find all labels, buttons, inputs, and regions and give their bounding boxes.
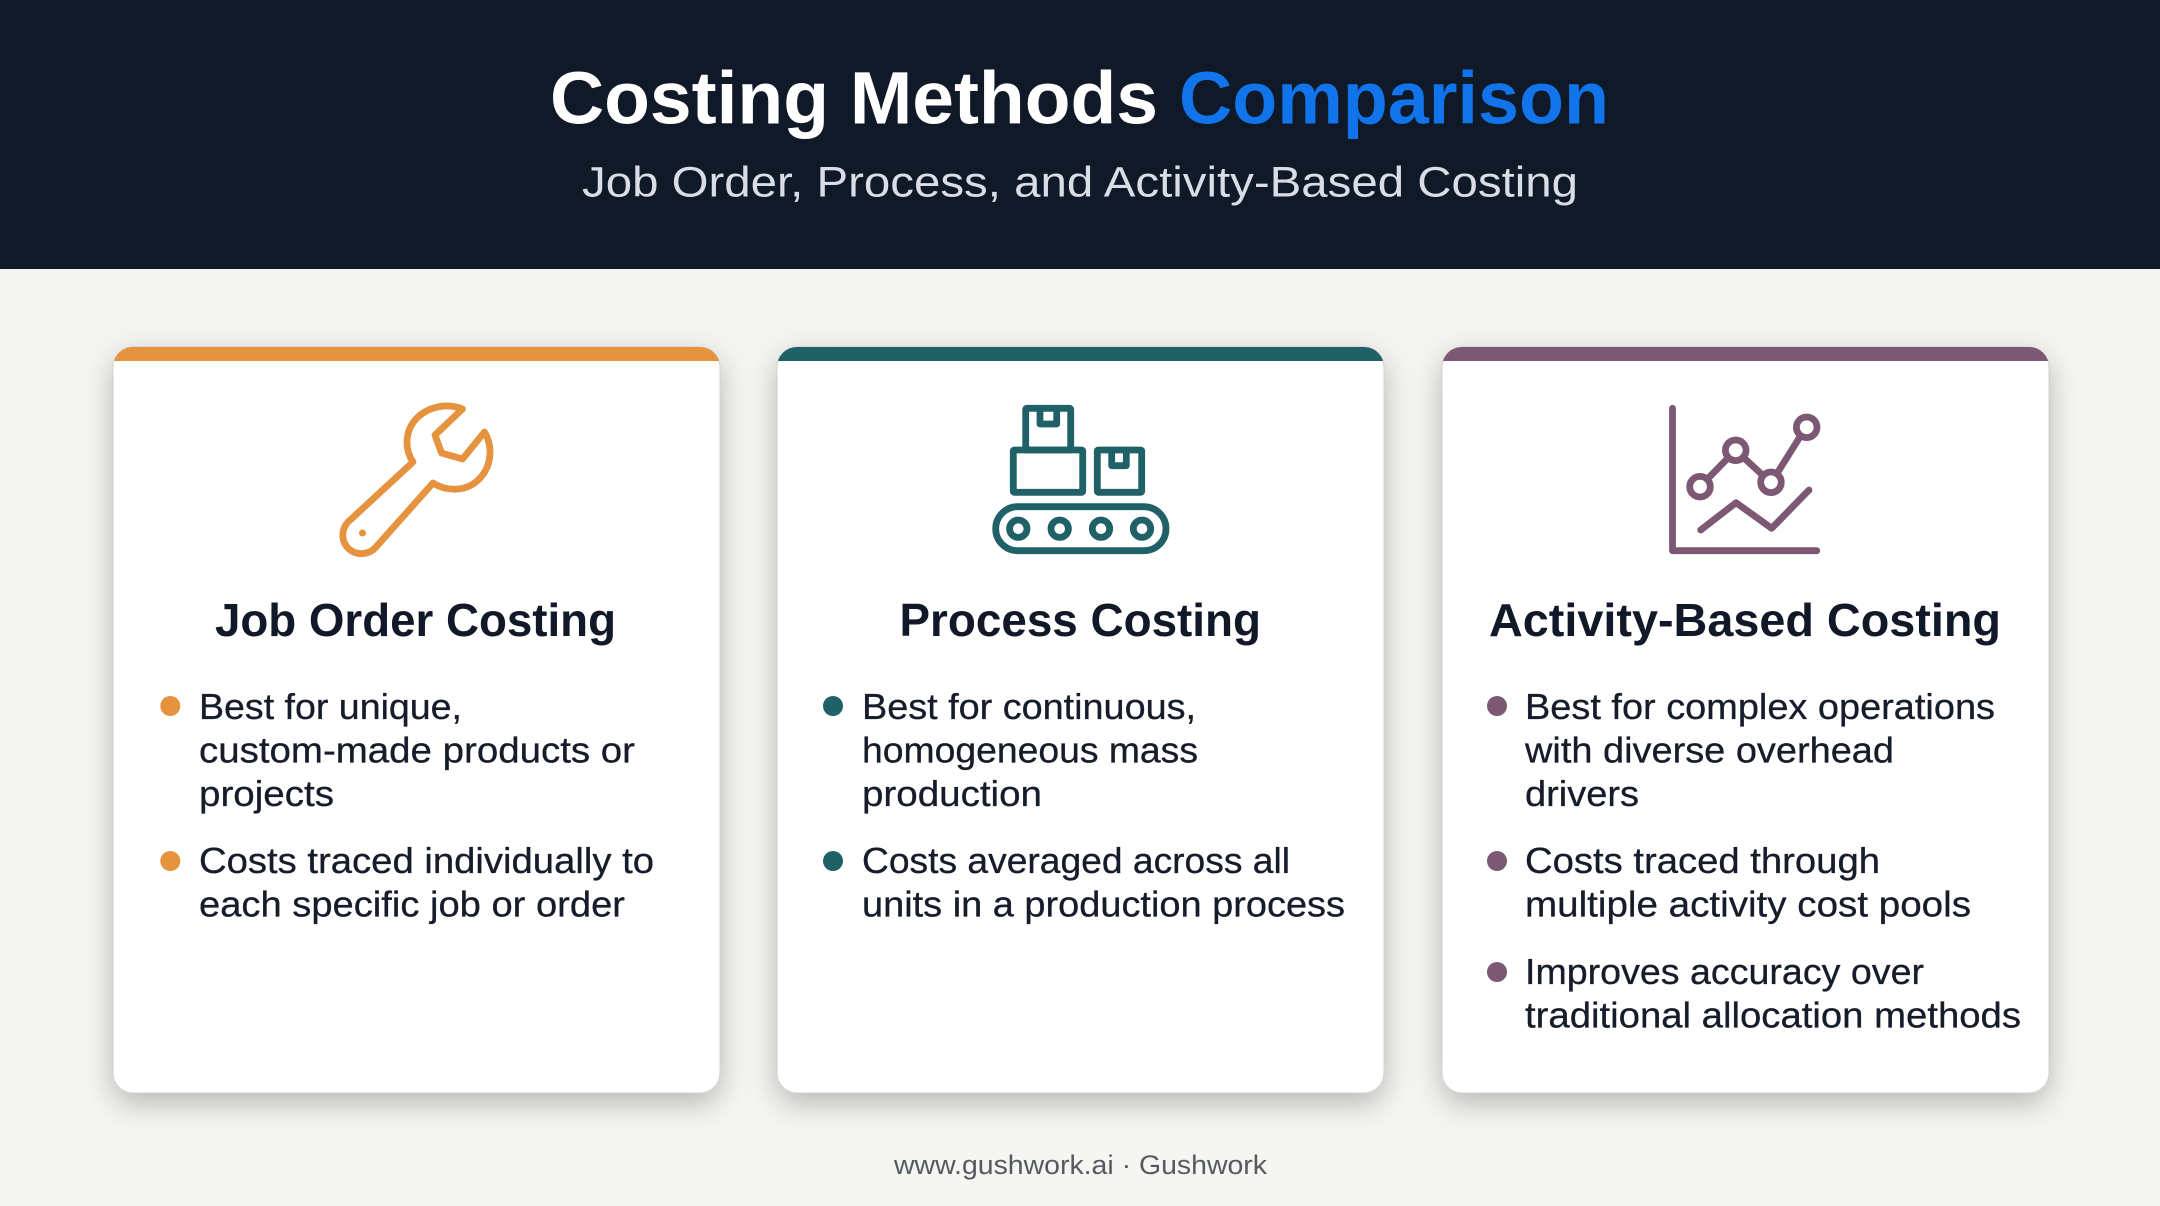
bullet: complex operations: with diverse overhead (1524, 730, 1894, 770)
accent bar: orange (113, 347, 720, 361)
icon: line chart (1672, 408, 1817, 551)
bullet: improves accuracy: Improves accuracy over (1525, 951, 1924, 992)
bullet: improves accuracy (1487, 951, 2021, 1036)
bullet: costs averaged: Costs averaged across all (862, 840, 1290, 881)
panel: process costing (777, 347, 1384, 1093)
card heading: Process Costing (900, 594, 1261, 646)
header band (0, 0, 2160, 269)
bullet: improves accuracy: traditional allocation methods (1525, 994, 2021, 1036)
bullet: costs traced (160, 840, 654, 924)
bullet: continuous production (823, 686, 1198, 814)
bullet: unique products: projects (199, 773, 334, 814)
title (550, 56, 1609, 140)
panel: activity-based costing (1442, 347, 2049, 1093)
icon: wrench (343, 406, 490, 554)
bullet: cost pools: multiple activity cost pools (1525, 884, 1971, 924)
card heading: Job Order Costing (215, 594, 616, 646)
bullet: costs traced: each specific job or order (199, 884, 625, 924)
bullet: continuous production: homogeneous mass (862, 730, 1198, 770)
accent bar: teal (777, 347, 1384, 361)
card heading: Activity-Based Costing (1489, 594, 2001, 646)
bullet: complex operations (1487, 686, 1995, 814)
bullet: unique products: custom-made products or (199, 730, 635, 770)
bullet: cost pools (1487, 840, 1971, 924)
icon: conveyor belt with boxes (996, 408, 1166, 551)
bullet: cost pools: Costs traced through (1525, 840, 1880, 881)
bullet: unique products: Best for unique, (199, 686, 462, 727)
subtitle: Job Order, Process, and Activity-Based Costing (582, 158, 1578, 206)
accent bar: purple (1442, 347, 2049, 361)
bullet: complex operations: drivers (1525, 773, 1639, 814)
title: Costing Methods (550, 56, 1158, 140)
bullet: continuous production: production (862, 773, 1042, 814)
bullet: costs averaged: units in a production process (862, 884, 1345, 924)
panel: job order costing (113, 347, 720, 1093)
footer: www.gushwork.ai · Gushwork (893, 1150, 1268, 1180)
bullet: costs traced: Costs traced individually to (199, 840, 654, 881)
bullet: costs averaged (823, 840, 1345, 924)
bullet: continuous production: Best for continuous, (862, 686, 1196, 727)
bullet: unique products (160, 686, 635, 814)
bullet: complex operations: Best for complex operations (1525, 686, 1995, 727)
title: Comparison (1179, 56, 1609, 140)
